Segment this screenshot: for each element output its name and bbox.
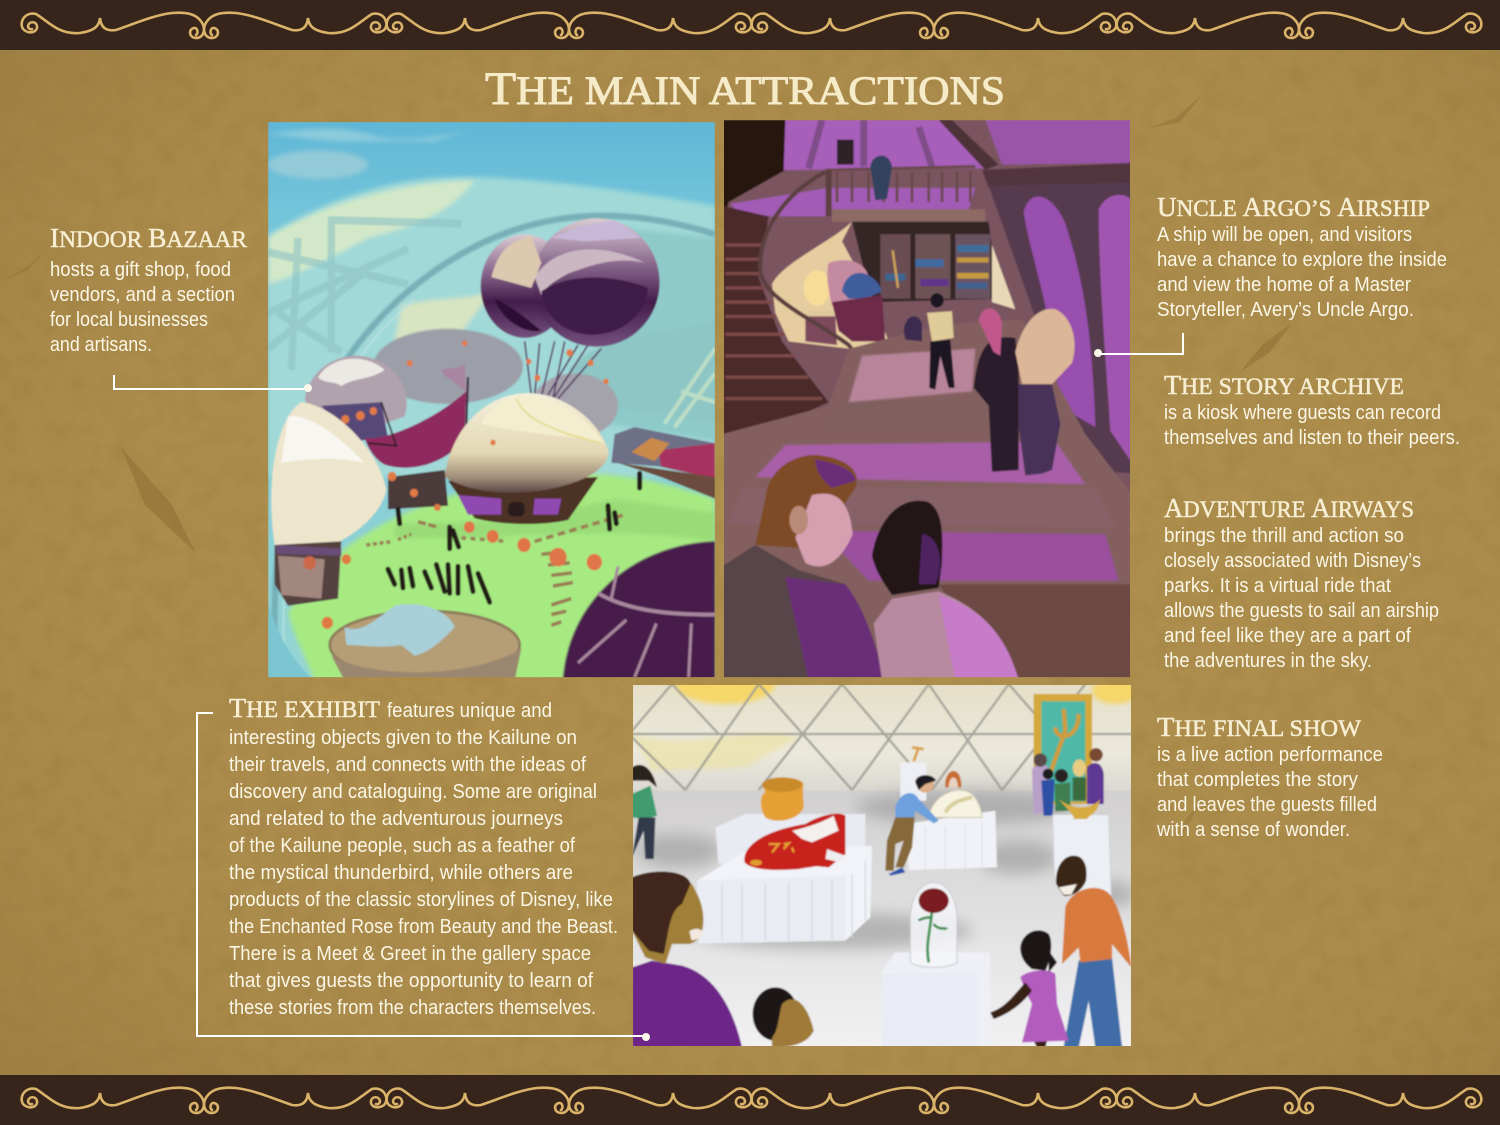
big left tent — [271, 402, 386, 550]
bottom ornamental banner — [0, 1075, 1500, 1125]
balcony — [730, 188, 975, 216]
market stalls right — [611, 427, 715, 479]
text: uncle argo's airship: UNCLE ARGO’S AIRSHIP — [1157, 192, 1430, 222]
text: uncle argo's airship — [1157, 192, 1447, 321]
central tent — [448, 477, 598, 524]
upper roof — [724, 120, 786, 208]
head statue and hammer — [945, 771, 961, 787]
text: the exhibit: interesting objects given to the Kailune on — [229, 727, 577, 749]
text: the exhibit: of the Kailune people, such as a feather of — [229, 835, 575, 857]
stair rail — [758, 170, 854, 350]
foreground plinth and rose — [882, 952, 990, 1047]
connector: airship — [1094, 333, 1183, 357]
floor shadows — [635, 791, 1135, 949]
back table and rose/vessel — [715, 814, 865, 864]
text: uncle argo's airship: have a chance to explore the inside — [1157, 249, 1447, 271]
text: the exhibit: and related to the adventurous journeys — [229, 808, 563, 830]
big purple dome — [563, 541, 715, 681]
text: the exhibit: discovery and cataloguing. Some are original — [229, 781, 597, 803]
standing couple — [974, 337, 1019, 472]
text: adventure airways: ADVENTURE AIRWAYS — [1164, 493, 1414, 523]
gallery figures — [837, 140, 854, 165]
text: uncle argo's airship: and view the home of a Master — [1157, 274, 1411, 296]
people — [384, 470, 644, 606]
floor — [724, 320, 1130, 648]
text: indoor bazaar: INDOOR BAZAAR — [50, 223, 248, 253]
bending man — [895, 793, 939, 823]
dome lattice — [632, 684, 1132, 790]
dome arc — [275, 216, 715, 681]
beam and right wall — [982, 163, 1132, 188]
text: adventure airways: allows the guests to sail an airship — [1164, 600, 1439, 622]
text: the story archive: themselves and listen to their peers. — [1164, 427, 1460, 449]
path dashes — [366, 515, 625, 625]
balloons — [525, 341, 601, 399]
text: indoor bazaar: vendors, and a section — [50, 284, 235, 306]
foreground boy — [753, 987, 798, 1041]
seated storyteller — [827, 260, 869, 306]
far tents — [373, 329, 523, 404]
text: the exhibit: There is a Meet & Greet in the gallery space — [229, 943, 591, 965]
illustration: indoor bazaar — [268, 120, 715, 720]
lattice — [268, 220, 461, 370]
text: indoor bazaar: hosts a gift shop, food — [50, 259, 231, 281]
text: adventure airways — [1164, 493, 1439, 672]
foreground man — [755, 455, 857, 549]
left small tent — [304, 355, 408, 424]
text: the exhibit: their travels, and connects with the ideas of — [229, 754, 586, 776]
text: adventure airways: brings the thrill and action so — [1164, 525, 1404, 547]
foreground woman — [632, 961, 742, 1047]
text: the exhibit: products of the classic storylines of Disney, like — [229, 889, 613, 911]
text: indoor bazaar: and artisans. — [50, 334, 152, 356]
text: the exhibit: features unique and — [387, 700, 552, 722]
illustration: the exhibit — [632, 664, 1139, 1051]
golden pot — [761, 778, 804, 821]
text: indoor bazaar: for local businesses — [50, 309, 208, 331]
foreground woman — [872, 501, 942, 595]
crowd at trident — [1032, 764, 1050, 814]
text: the final show: that completes the story — [1157, 769, 1358, 791]
text: the exhibit: the Enchanted Rose from Beauty and the Beast. — [229, 916, 618, 938]
text: the final show: and leaves the guests filled — [1157, 794, 1377, 816]
text: the exhibit: that gives guests the opportunity to learn of — [229, 970, 593, 992]
arched windows — [1024, 196, 1095, 427]
fish pool — [330, 611, 520, 679]
text: the exhibit — [229, 693, 618, 1019]
text: adventure airways: the adventures in the sky. — [1164, 650, 1372, 672]
text: the story archive — [1164, 370, 1460, 449]
tall man — [1064, 957, 1122, 1047]
text: the exhibit: these stories from the characters themselves. — [229, 997, 596, 1019]
curved wall — [772, 222, 889, 349]
title: THE MAIN ATTRACTIONS — [485, 63, 1005, 115]
lamp on plinth — [1053, 815, 1111, 897]
text: the final show: is a live action performance — [1157, 744, 1383, 766]
connector: indoor bazaar — [114, 375, 312, 392]
red drape — [365, 391, 466, 468]
left stairs — [722, 206, 829, 441]
text: the story archive: is a kiosk where guests can record — [1164, 402, 1441, 424]
text: adventure airways: closely associated with Disney’s — [1164, 550, 1421, 572]
connector: the exhibit — [197, 713, 650, 1041]
text: indoor bazaar — [50, 223, 248, 356]
red rocket — [744, 814, 845, 870]
text: uncle argo's airship: A ship will be open, and visitors — [1157, 224, 1412, 246]
illustration: airship interior — [722, 120, 1132, 720]
bookshelves — [852, 222, 999, 302]
text: the final show — [1156, 712, 1383, 841]
woman left edge — [632, 786, 657, 819]
text: the story archive: THE STORY ARCHIVE — [1164, 370, 1404, 400]
top ornamental banner — [0, 0, 1500, 50]
feather table — [905, 811, 997, 870]
text: the final show: THE FINAL SHOW — [1157, 712, 1361, 742]
text: the exhibit: the mystical thunderbird, while others are — [229, 862, 573, 884]
text: adventure airways: parks. It is a virtual ride that — [1164, 575, 1391, 597]
green ground — [288, 474, 715, 681]
golden trident frame — [1034, 694, 1092, 804]
text: the exhibit: THE EXHIBIT — [229, 693, 380, 723]
text: the final show: with a sense of wonder. — [1156, 819, 1350, 841]
text: uncle argo's airship: Storyteller, Avery’s Uncle Argo. — [1157, 299, 1414, 321]
text: adventure airways: and feel like they are a part of — [1164, 625, 1411, 647]
small man — [927, 311, 954, 341]
girl — [1034, 1041, 1047, 1047]
